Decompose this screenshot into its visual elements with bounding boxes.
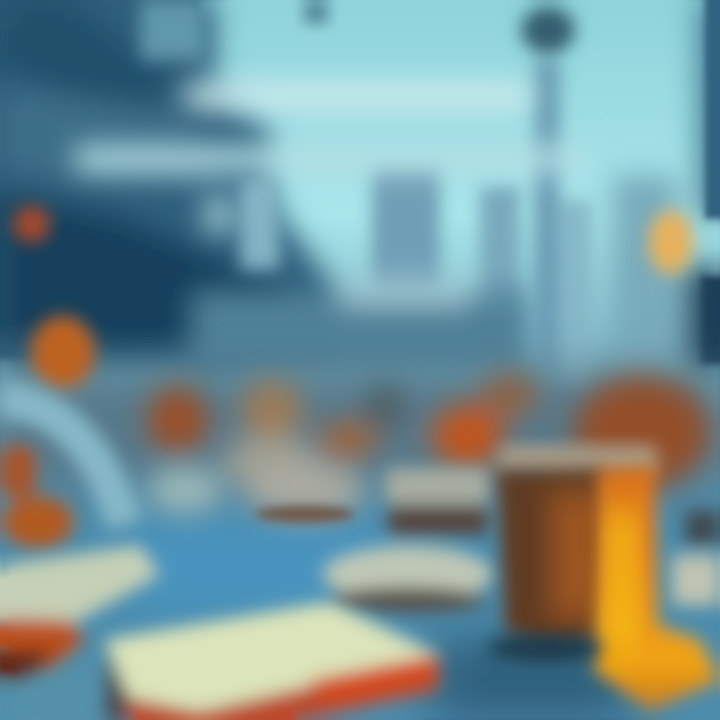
central towers bbox=[140, 0, 520, 305]
cup rim bbox=[498, 445, 658, 475]
tower top bbox=[521, 6, 575, 54]
arched bridge bbox=[0, 400, 125, 525]
edge underlay: front book bbox=[135, 708, 295, 720]
mid-ground haze and buildings bbox=[190, 280, 530, 375]
lower scene tone bbox=[0, 375, 720, 720]
right edge building bbox=[612, 0, 720, 380]
row of bowls and buns bbox=[147, 373, 540, 518]
left building mass bbox=[0, 0, 345, 370]
fire highlight bbox=[610, 510, 634, 650]
tea cup bbox=[497, 445, 720, 710]
cup fire stripe bbox=[595, 465, 720, 710]
stacked plates bbox=[323, 468, 493, 613]
top dark blob bbox=[304, 0, 328, 24]
tower pole bbox=[534, 60, 592, 390]
left orange pile bbox=[0, 445, 74, 548]
small orange light bbox=[14, 206, 50, 242]
edge underlay: left book bbox=[0, 575, 18, 674]
cup amber glow bbox=[550, 490, 600, 620]
right side plates bbox=[672, 510, 720, 605]
cup body bbox=[497, 470, 605, 644]
bowl base bbox=[255, 505, 355, 523]
edge underlay: left and right building bbox=[0, 0, 720, 365]
left open book bbox=[0, 545, 160, 680]
orange blob left bbox=[31, 316, 95, 388]
glowing lamp bbox=[649, 210, 693, 274]
round brown loaf bbox=[574, 376, 710, 488]
blurred title lines bbox=[75, 84, 585, 232]
front open book bbox=[105, 602, 440, 720]
cup shadow bbox=[487, 634, 603, 662]
